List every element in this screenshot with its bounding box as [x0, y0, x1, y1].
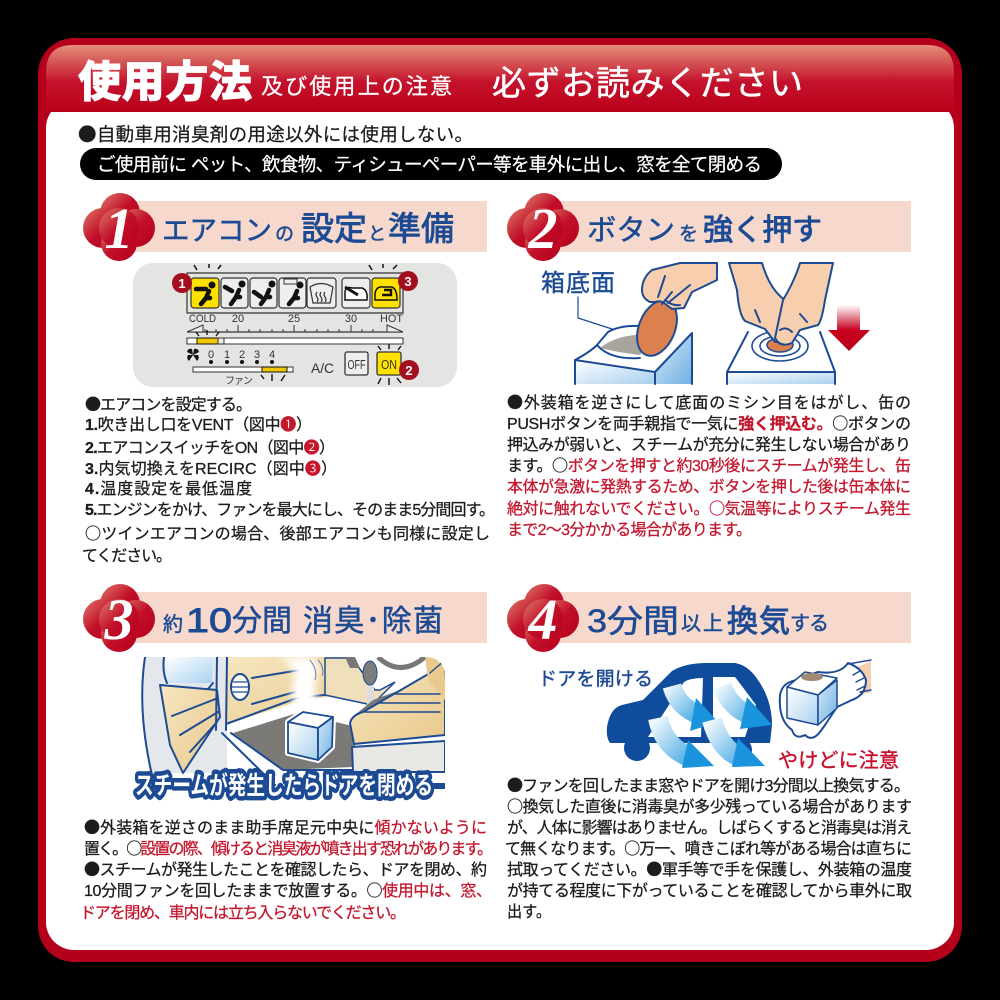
step 2 heading: 強く押す [703, 214, 822, 247]
step 4 text [505, 772, 912, 921]
step 3 text: ドアを閉め、車内には立ち入らないでください。 [80, 904, 406, 922]
right hand [775, 263, 833, 345]
label: open doors: ドアを開ける [538, 669, 653, 690]
fan speed labels: 3 [254, 349, 260, 361]
step 4 heading: 3分間 [587, 603, 679, 639]
step 2 badge: 2 [528, 196, 558, 261]
step 2 text: 本体が急激に発熱するため、ボタンを押した後は缶本体に [507, 477, 911, 496]
icon: foot and defrost mode [279, 278, 306, 308]
step 3 heading: 消臭･除菌 [303, 605, 443, 638]
temperature labels: COLD [189, 313, 216, 325]
marker 3 [398, 271, 418, 291]
temperature labels: 25 [288, 313, 300, 325]
step 2 badge [507, 193, 579, 261]
step 4 text: て無くなります。○万一、噴きこぼれ等がある場合は直ちに [505, 835, 912, 859]
seat [350, 660, 445, 744]
illustration: gloved hand holding box [780, 660, 871, 738]
icon: bi-level mode [221, 278, 248, 308]
step 3 heading [83, 584, 487, 652]
step 1 heading: 準備 [388, 210, 454, 247]
step 2 text: 絶対に触れないでください。○気温等によりスチーム発生 [507, 495, 911, 519]
air conditioner panel diagram [133, 263, 457, 387]
temperature labels: 30 [345, 313, 357, 325]
step 3 text: 10分間ファンを回したままで放置する。○使用中は、窓、 [84, 877, 492, 901]
step 4 heading: 換気 [727, 604, 790, 639]
icon: vent mode [191, 278, 219, 308]
general note: ●自動車用消臭剤の用途以外には使用しない。 [78, 121, 473, 147]
icon: fresh air mode [342, 278, 370, 308]
fan label: ファン [225, 376, 253, 387]
step 1 text: 4.温度設定を最低温度 [85, 480, 252, 498]
step 4 heading [507, 584, 911, 652]
illustration: peeling box bottom [541, 263, 717, 384]
illustration: car interior [142, 657, 445, 790]
temperature labels: 20 [232, 313, 244, 325]
step 2 text [507, 389, 911, 539]
temperature labels [189, 313, 403, 325]
thumb pad [629, 294, 685, 362]
step 4 text: が持てる程度に下がっていることを確認してから車外に取 [507, 882, 912, 900]
read notice: 必ずお読みください [492, 65, 803, 103]
A/C label: A/C [311, 360, 334, 376]
step 1 text: 2.エアコンスイッチをON（図中❷） [85, 439, 335, 457]
icon: foot mode [250, 278, 277, 308]
step 4 badge: 4 [528, 587, 558, 652]
step 3 heading: 約 [163, 613, 183, 636]
step 3 heading: 分間 [232, 605, 292, 638]
vent [231, 674, 249, 700]
step 4 badge [507, 584, 579, 652]
title: 使用方法 [78, 59, 252, 107]
temperature labels: HOT [380, 313, 403, 325]
step 3 heading: 10 [186, 602, 232, 640]
step 1 badge [83, 193, 155, 261]
label: box bottom: 箱底面 [541, 270, 615, 297]
marker 1: 1 [178, 276, 186, 291]
marker 2 [399, 360, 419, 380]
fan speed labels: 2 [239, 349, 245, 361]
dashboard [227, 724, 228, 768]
steam caption: スチームが発生したらドアを閉める [135, 771, 433, 800]
on button: ON [381, 357, 397, 372]
fan speed labels [208, 349, 275, 364]
marker 2: 2 [405, 363, 413, 378]
step 3 badge: 3 [104, 587, 134, 652]
step 3 badge [83, 584, 155, 652]
step 1 text: ●エアコンを設定する。 [85, 391, 252, 415]
step 3 text: 置く。○設置の際、傾けると消臭液が噴き出す恐れがあります。 [84, 835, 493, 859]
illustration: pressing the button [727, 263, 835, 384]
icon: recirculation mode [372, 278, 400, 308]
step 4 heading: 以上 [681, 612, 723, 635]
step 1 text [82, 391, 495, 565]
illustration: ventilated car [607, 663, 772, 768]
steering wheel [378, 657, 425, 668]
off button: OFF [348, 357, 366, 372]
step 4 text: が、人体に影響はありません。しばらくすると消毒臭は消え [507, 819, 912, 837]
step 4 text: ○換気した直後に消毒臭が多少残っている場合があります [507, 793, 912, 817]
step 3 text [80, 814, 493, 922]
steam [279, 657, 323, 704]
step 1 text: 1.吹き出し口をVENT（図中❶） [85, 416, 312, 434]
icon: rays [194, 264, 397, 270]
step 1 heading: 設定 [301, 210, 367, 247]
arrow: press down [828, 305, 870, 351]
marker 3: 3 [404, 274, 412, 289]
label: burn warning: やけどに注意 [778, 749, 899, 772]
hand [642, 263, 717, 309]
door sill [222, 733, 352, 785]
step 1 heading: の [275, 224, 294, 245]
temperature scale [187, 325, 403, 332]
door [142, 657, 228, 773]
step 1 text: ○ツインエアコンの場合、後部エアコンも同様に設定し [85, 520, 490, 544]
fan speed labels: 1 [224, 349, 230, 361]
shifter [363, 661, 377, 705]
step 1 heading [83, 193, 487, 261]
off button [345, 352, 368, 375]
step 2 text: PUSHボタンを両手親指で一気に強く押込む。○ボタンの [507, 410, 911, 434]
step 2 heading: を [679, 224, 698, 245]
seat base [352, 741, 445, 772]
console [325, 658, 395, 705]
step 2 heading: ボタン [587, 215, 675, 247]
on button [377, 344, 401, 385]
step 4 text: 出す。 [507, 903, 551, 921]
black preparation banner: ご使用前に ペット、飲食物、ティシューペーパー等を車外に出し、窓を全て閉める [97, 154, 762, 175]
header band [46, 45, 954, 112]
black preparation banner [80, 148, 782, 180]
fan speed labels: 0 [208, 349, 214, 361]
step 1 text: てください。 [82, 547, 172, 565]
step 2 text: ます。○ボタンを押すと約30秒後にスチームが発生し、缶 [507, 452, 911, 476]
step 2 text: 押込みが弱いと、スチームが充分に発生しない場合があり [507, 436, 911, 454]
content panel [46, 100, 954, 950]
fan slider [193, 367, 293, 381]
fan speed labels: 4 [269, 349, 275, 361]
step 3 text: ●スチームが発生したことを確認したら、ドアを閉め、約 [84, 856, 487, 880]
step 4 text: 拭取ってください。●軍手等で手を保護し、外装箱の温度 [507, 856, 912, 880]
step 1 text: 3.内気切換えをRECIRC（図中❸） [85, 460, 337, 478]
temperature slider [187, 330, 403, 344]
step 4 text: ●ファンを回したまま窓やドアを開け3分間以上換気する。 [507, 772, 910, 796]
step 1 badge: 1 [104, 196, 134, 261]
car windows [648, 678, 703, 737]
marker 1 [172, 273, 192, 293]
step 1 heading: エアコン [162, 215, 272, 246]
step 2 heading [507, 193, 911, 261]
aerosol box [288, 712, 333, 760]
step 4 heading: する [790, 613, 829, 635]
step 1 text: 5.エンジンをかけ、ファンを最大にし、そのまま5分間回す。 [85, 501, 495, 519]
step 1 heading: と [368, 224, 386, 244]
step 2 text: まで2〜3分かかる場合があります。 [507, 521, 752, 539]
subtitle: 及び使用上の注意 [261, 74, 452, 99]
floor [233, 713, 357, 770]
fan icon [187, 349, 199, 361]
airflow arrows [672, 686, 702, 716]
icon: defrost mode [307, 278, 336, 308]
left hand [729, 263, 790, 342]
step 2 text: ●外装箱を逆さにして底面のミシン目をはがし、缶の [507, 389, 911, 413]
step 3 text: ●外装箱を逆さのまま助手席足元中央に傾かないように [84, 814, 487, 838]
